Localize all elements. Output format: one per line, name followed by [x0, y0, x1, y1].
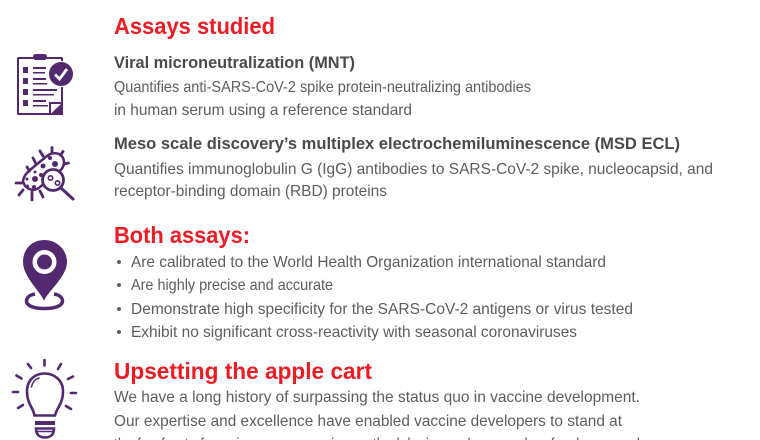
- heading: Assays studied: Assays studied: [114, 13, 275, 39]
- text: MSD ECL description: Quantifies immunoglobulin G (IgG) antibodies to SARS-CoV-2 spike, nucleocapsid, and: [114, 161, 713, 178]
- bullet list: [117, 254, 633, 341]
- icon: clipboard checklist: [17, 54, 74, 115]
- heading: Both assays: Both assays:: [114, 222, 250, 248]
- text: closing paragraph: [114, 389, 640, 440]
- icon: bacterium with magnifier: [16, 148, 73, 200]
- icon: light bulb: [13, 360, 76, 438]
- icon: location pin: [23, 240, 67, 308]
- bullet list: Are highly precise and accurate: [131, 277, 333, 294]
- text: closing paragraph: We have a long history of surpassing the status quo in vaccine development.: [114, 389, 640, 406]
- heading: Upsetting the apple cart: Upsetting the apple cart: [114, 358, 372, 384]
- text: MSD ECL description: receptor-binding domain (RBD) proteins: [114, 183, 387, 200]
- text: closing paragraph: Our expertise and excellence have enabled vaccine developers to stand at: [114, 413, 623, 430]
- bullet list: Are calibrated to the World Health Organization international standard: [131, 254, 606, 271]
- bullet list: Exhibit no significant cross-reactivity with seasonal coronaviruses: [131, 324, 577, 341]
- bullet list: Demonstrate high specificity for the SARS-CoV-2 antigens or virus tested: [131, 301, 633, 318]
- text: MSD ECL description: [114, 161, 713, 200]
- text: MNT description: in human serum using a reference standard: [114, 102, 412, 119]
- text: MNT description: [114, 79, 531, 119]
- subheading: MNT: Viral microneutralization (MNT): [114, 53, 355, 72]
- subheading: MSD ECL: Meso scale discovery’s multiplex electrochemiluminescence (MSD ECL): [114, 134, 680, 153]
- text: MNT description: Quantifies anti-SARS-CoV-2 spike protein-neutralizing antibodies: [114, 79, 531, 96]
